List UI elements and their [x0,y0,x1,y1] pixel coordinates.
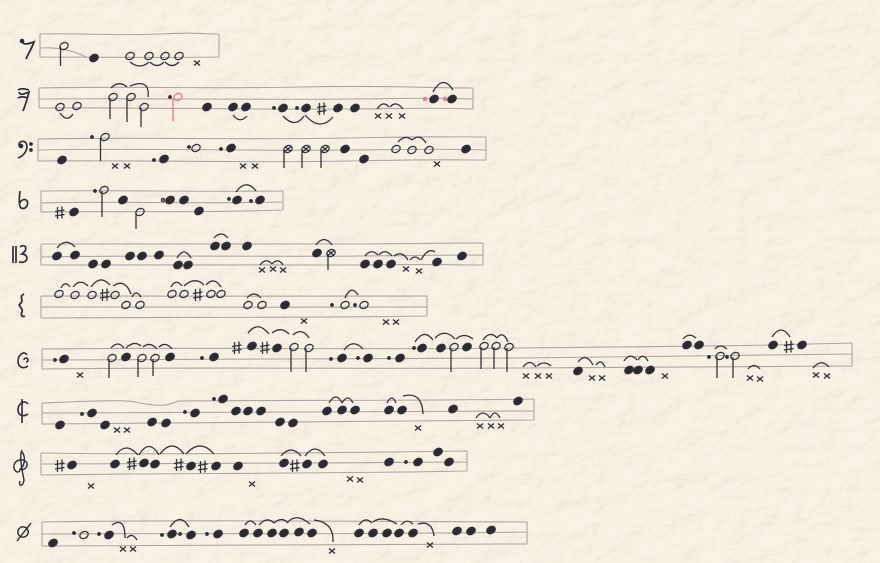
staff 6 [19,280,427,324]
staff 4 lines [41,191,283,212]
staff 8 clef [18,399,28,423]
staff 9 clef [14,450,27,485]
staff 3 lines [38,137,486,162]
staff 5 notes [51,234,468,274]
staff 9 lines [41,451,467,475]
staff 7 [18,327,852,382]
staff 7 lines [42,343,852,369]
staff 2 clef [18,89,29,111]
staff 6 lines [41,296,427,318]
staff 8 notes [54,394,524,432]
staff 10 [17,518,527,554]
staff 8 [18,394,534,432]
staff 4 clef [19,191,28,208]
staff 6 clef [19,294,25,316]
staff 3 clef [18,141,32,158]
staff 4 notes [55,185,266,229]
staff 9 notes [55,446,455,488]
staff 9 [14,446,467,488]
staff 10 lines [42,521,527,546]
staff 8 lines [42,399,534,424]
staff 5 lines [41,243,483,265]
staff 10 clef [17,523,31,541]
staff 3 notes [56,132,472,168]
staff 1 [21,33,219,66]
staff 4 [19,185,283,229]
staff 5 clef [13,246,27,263]
staff 1 clef [21,40,34,59]
staff 2 lines [39,86,473,109]
staff 6 notes [54,280,399,324]
staff 5 [13,234,483,274]
staff 3 [18,132,486,168]
staff 1 lines [40,33,219,57]
staff 10 notes [47,518,497,554]
staff 2 [18,82,473,127]
pink note and pink dots [173,92,447,121]
staff 2 notes [55,82,458,127]
staff 7 notes [54,327,830,382]
staff 7 clef [18,353,28,368]
staff 1 notes [59,41,200,66]
